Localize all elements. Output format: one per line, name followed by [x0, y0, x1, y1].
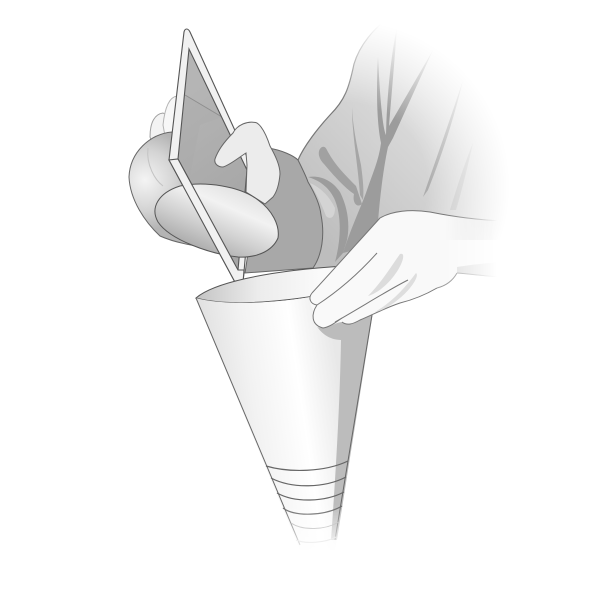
cone body: [196, 297, 341, 510]
light patch of sleeve cuff: [310, 183, 335, 218]
right hand on cone: [310, 211, 505, 328]
sleeve cuff near glove: [245, 148, 323, 273]
palm of hand holding frame: [129, 132, 240, 260]
thumb: [155, 184, 278, 257]
cone opening: [196, 266, 345, 303]
flexible frame: [169, 29, 253, 287]
fingers of right hand: [310, 253, 437, 328]
frame strip over thumb: [169, 159, 244, 287]
illustration: hands pouring from a flexible frame into a paper cone filter: [128, 28, 496, 546]
far fingers of hand: [150, 96, 177, 142]
cone rings: [266, 461, 348, 514]
sleeve: [298, 28, 490, 268]
paper cone filter: [196, 266, 373, 550]
sleeve fold shadows: [308, 27, 473, 262]
index finger and wrist of glove: [215, 122, 280, 204]
frame pane: [176, 48, 248, 272]
